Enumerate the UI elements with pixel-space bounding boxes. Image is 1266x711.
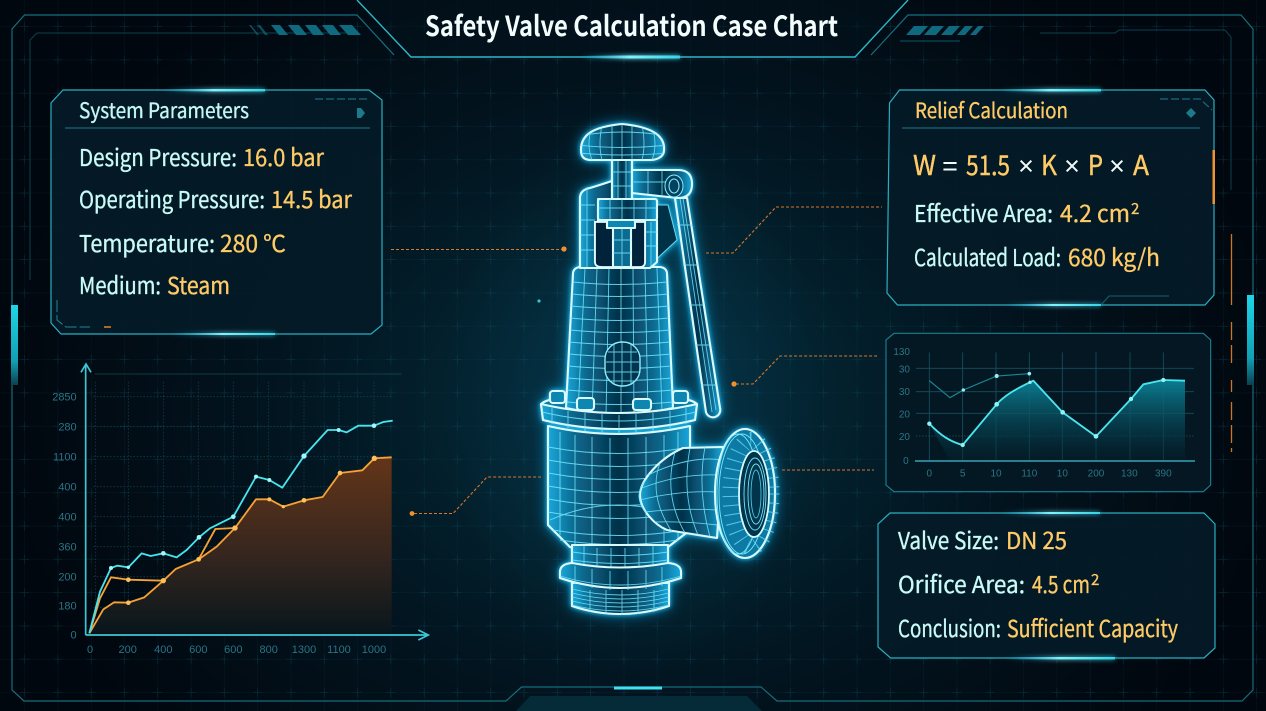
operating pressure: Operating Pressure: <box>79 181 265 215</box>
chart y labels: 20 <box>899 409 910 420</box>
design pressure: Design Pressure: <box>79 139 237 173</box>
calculated load: 680 kg/h <box>1068 239 1160 273</box>
chart x labels: 130 <box>1121 469 1138 480</box>
connector: right chart to valve <box>731 356 878 387</box>
formula <box>913 144 1150 183</box>
design pressure: 16.0 bar <box>243 139 325 173</box>
chart x labels: 390 <box>1155 469 1172 480</box>
formula: W <box>913 144 936 183</box>
valve: lever arm <box>632 170 720 417</box>
chart x labels: 5 <box>960 469 966 480</box>
temperature: 280 ℃ <box>220 225 286 259</box>
panel: valve sizing conclusion <box>878 512 1215 659</box>
chart x labels: 1100 <box>327 644 351 656</box>
formula: A <box>1133 144 1150 183</box>
chart y labels: 400 <box>58 511 77 523</box>
calculated load: Calculated Load: <box>914 239 1061 273</box>
frame stripes: top right <box>900 26 984 42</box>
valve: main flange top <box>541 394 697 416</box>
operating pressure: 14.5 bar <box>271 181 353 215</box>
valve: flange band <box>541 404 697 434</box>
effective area: 4.2 cm <box>1060 195 1130 229</box>
valve: yoke bracket <box>580 181 677 268</box>
chart y labels: 2850 <box>52 391 77 403</box>
chart x labels: 400 <box>154 644 172 656</box>
valve: lower neck <box>572 545 668 570</box>
valve: flange bolts <box>550 391 688 410</box>
valve size <box>898 522 1067 556</box>
temperature: Temperature: <box>79 225 215 259</box>
connector: outlet to bottom panel <box>782 469 874 471</box>
frame stripes: top left <box>249 25 361 35</box>
chart axis <box>915 458 1195 464</box>
valve: thread <box>572 583 669 615</box>
chart y labels: 360 <box>58 541 77 553</box>
orifice area: 2 <box>1091 569 1099 590</box>
formula: × <box>1109 151 1125 181</box>
chart y labels: 200 <box>58 571 77 583</box>
chart y labels: 30 <box>899 365 910 376</box>
chart: orange area <box>89 457 392 633</box>
chart x labels: 200 <box>1088 469 1105 480</box>
panel: right area chart <box>886 333 1211 492</box>
chart: teal area <box>929 380 1185 461</box>
valve: oval window <box>605 342 640 386</box>
chart axes <box>81 364 428 640</box>
formula: × <box>1018 151 1034 181</box>
title text: Safety Valve Calculation Case Chart <box>425 5 838 45</box>
connector: relief calculation to valve <box>706 207 882 253</box>
chart y labels <box>52 391 77 642</box>
conclusion: Conclusion: <box>898 610 1001 644</box>
chart: points <box>927 372 1165 447</box>
chart x labels: 1300 <box>292 644 316 656</box>
medium: Steam <box>167 267 230 301</box>
chart x labels: 600 <box>224 644 242 656</box>
conclusion: Sufficient Capacity <box>1007 610 1178 644</box>
valve: bonnet <box>566 267 673 416</box>
chart: orange lines <box>89 457 392 633</box>
chart: cyan line <box>89 421 393 633</box>
chart y labels: 20 <box>899 432 910 443</box>
icon: panel marker <box>1186 108 1196 118</box>
chart: cyan points <box>109 423 376 570</box>
chart y labels: 400 <box>58 481 77 493</box>
chart: main line <box>929 380 1185 445</box>
chart y labels: 0 <box>903 456 909 467</box>
chart x labels: 800 <box>260 644 278 656</box>
formula: K <box>1041 144 1058 183</box>
chart: left line chart <box>52 364 428 656</box>
orifice area: 4.5 cm <box>1032 566 1090 600</box>
chart grid <box>916 352 1194 461</box>
title banner <box>357 0 908 58</box>
chart y labels: 1100 <box>53 451 77 463</box>
heading: system parameters: System Parameters <box>79 95 249 125</box>
valve: wireframe illustration <box>541 124 775 615</box>
heading: relief calculation: Relief Calculation <box>915 95 1068 125</box>
chart y labels: 0 <box>71 630 77 642</box>
chart x labels <box>87 644 386 656</box>
chart y labels: 130 <box>893 347 910 358</box>
medium: Medium: <box>79 267 161 301</box>
valve: outlet flange <box>715 429 775 558</box>
connector: system parameters to valve <box>391 246 567 252</box>
chart x labels: 1000 <box>362 644 386 656</box>
chart x labels: 10 <box>990 469 1002 480</box>
effective area: Effective Area: <box>914 195 1053 229</box>
panel: relief calculation <box>887 89 1215 306</box>
valve size: Valve Size: <box>898 522 999 556</box>
valve: stem and collar <box>598 160 657 267</box>
effective area: 2 <box>1131 198 1139 219</box>
orifice area <box>898 566 1099 600</box>
effective area <box>914 195 1139 229</box>
valve: knob <box>578 124 668 160</box>
valve: body <box>548 426 690 552</box>
chart x labels <box>927 469 1172 480</box>
connector: left chart to valve <box>410 477 541 516</box>
orifice area: Orifice Area: <box>898 566 1025 600</box>
chart: orange points <box>126 456 377 605</box>
valve: lower flange <box>560 563 681 590</box>
medium <box>79 267 230 301</box>
marker dot <box>537 299 541 303</box>
icon: panel marker <box>357 108 365 118</box>
conclusion <box>898 610 1178 644</box>
valve: outlet pipe <box>639 447 723 538</box>
formula: = <box>942 151 958 181</box>
chart x labels: 600 <box>189 644 207 656</box>
chart y labels: 30 <box>899 387 910 398</box>
side accents: orange <box>1230 234 1232 452</box>
chart x labels: 200 <box>119 644 137 656</box>
chart x labels: 110 <box>1021 469 1038 480</box>
formula: 51.5 <box>966 144 1010 183</box>
chart y labels: 280 <box>58 421 77 433</box>
chart y labels <box>893 347 910 467</box>
chart grid <box>93 374 402 633</box>
chart: secondary line <box>929 374 1029 398</box>
chart x labels: 0 <box>87 644 93 656</box>
chart y labels: 180 <box>58 601 77 613</box>
formula: × <box>1064 151 1080 181</box>
panel: system parameters <box>51 89 382 335</box>
valve size: DN 25 <box>1006 522 1067 556</box>
formula: P <box>1088 144 1103 183</box>
chart x labels: 10 <box>1057 469 1068 480</box>
chart x labels: 0 <box>927 469 933 480</box>
